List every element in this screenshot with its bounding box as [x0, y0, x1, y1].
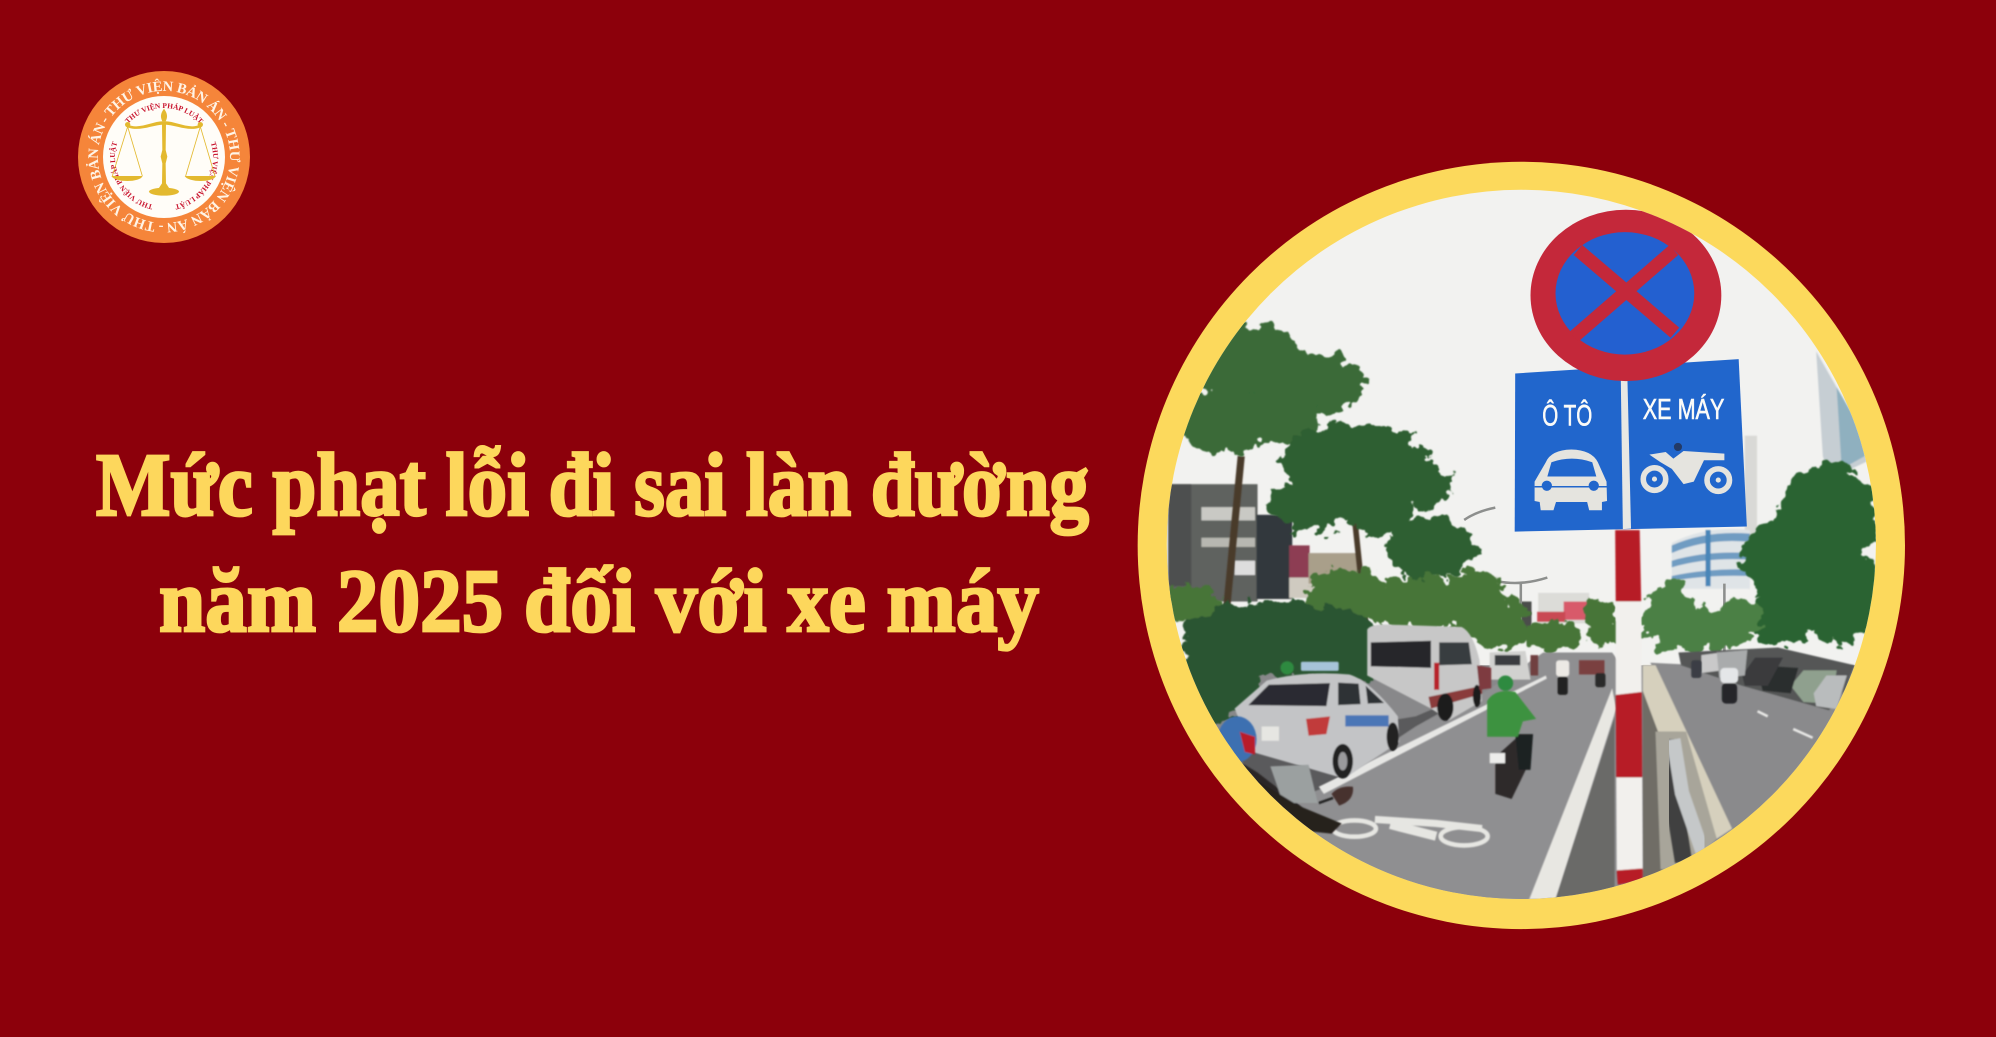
logo inner red text: THƯ VIỆN PHÁP LUẬT [176, 142, 218, 210]
street lamps [1464, 508, 1724, 653]
label: Ô TÔ: Ô TÔ [1542, 399, 1592, 433]
street photo [1161, 186, 1885, 905]
lane sign panel [1515, 359, 1747, 532]
logo white centre [103, 96, 225, 218]
tree trunks left [1222, 455, 1370, 622]
logo inner red text: THƯ VIỆN PHÁP LUẬT [124, 103, 204, 122]
trees left [1161, 323, 1618, 721]
icon: car [1535, 449, 1607, 510]
guard rail [1671, 739, 1702, 862]
panel divider [1621, 380, 1631, 529]
logo orange ring [78, 71, 250, 243]
road markings [1319, 676, 1813, 905]
painted motorbike on road [1333, 819, 1488, 845]
title line 2: năm 2025 đối với xe máy [159, 552, 1039, 651]
right parked cars [1678, 647, 1854, 710]
icon: golden scales [111, 109, 216, 196]
sign pole [1615, 530, 1643, 885]
taxi [1235, 661, 1399, 779]
sky [1161, 186, 1885, 905]
label: XE MÁY: XE MÁY [1643, 393, 1724, 426]
road surfaces [1232, 653, 1854, 905]
photo medallion: street with no-parking lane sign [1138, 162, 1905, 929]
logo: Thư Viện Bản Án seal [78, 71, 250, 243]
small riders ahead [1490, 651, 1738, 704]
ground base [1188, 665, 1855, 899]
van [1367, 624, 1491, 721]
background buildings [1168, 352, 1867, 632]
foreground scooter rider [1218, 716, 1353, 839]
sign red rim [1531, 210, 1721, 381]
sign red cross [1574, 250, 1675, 337]
logo inner red text [109, 103, 218, 210]
yellow ring [1138, 162, 1905, 929]
blue panel [1515, 359, 1747, 532]
logo ring text: - THƯ VIỆN BẢN ÁN - THƯ VIỆN BẢN ÁN - THƯ VIỆN BẢN ÁN [86, 78, 241, 234]
icon: motorbike [1643, 443, 1729, 491]
green-jacket motorbike rider [1487, 676, 1536, 799]
no-parking road sign [1531, 210, 1721, 381]
logo inner red text: THƯ VIỆN PHÁP LUẬT [109, 141, 152, 210]
title line 1: Mức phạt lỗi đi sai làn đường [96, 436, 1089, 535]
trees right [1643, 464, 1880, 651]
title [96, 436, 1089, 651]
sign blue centre [1556, 232, 1694, 355]
